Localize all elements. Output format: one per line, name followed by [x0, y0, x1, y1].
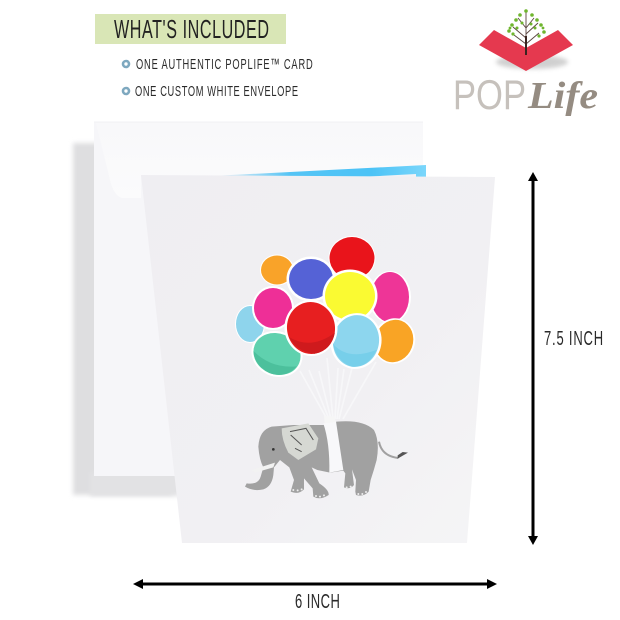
balloon: red center [281, 297, 341, 359]
elephant strap [323, 421, 343, 473]
logo: PopLife: Life [527, 75, 598, 117]
logo: PopLife [453, 9, 598, 118]
elephant tusk [252, 463, 275, 473]
balloon: red top [328, 236, 376, 280]
list of included items [123, 56, 313, 100]
balloon: orange right [366, 312, 422, 370]
card front [141, 175, 495, 543]
balloon: pink right [369, 271, 411, 323]
balloon strings [300, 358, 376, 419]
balloon: teal [244, 323, 310, 385]
balloon: yellow [322, 270, 378, 322]
elephant toes [292, 486, 367, 498]
balloon: light blue left [235, 305, 265, 343]
elephant tail [379, 442, 398, 458]
balloon: pink left [252, 286, 294, 330]
balloon: orange back left [260, 254, 294, 286]
logo: PopLife: POP [453, 71, 526, 118]
elephant [245, 416, 408, 498]
list of included items: ONE CUSTOM WHITE ENVELOPE [135, 83, 298, 100]
elephant body [245, 421, 378, 498]
elephant ear [282, 423, 318, 460]
list of included items: ONE AUTHENTIC POPLIFE™ CARD [136, 56, 313, 73]
label: 6 inch: 6 INCH [295, 590, 340, 613]
blue insert card peeking out [154, 165, 426, 182]
balloon: blue [286, 256, 336, 302]
balloon: light blue right [326, 309, 386, 373]
elephant eye [272, 448, 275, 451]
arrow: height [528, 172, 538, 545]
label: 7.5 inch: 7.5 INCH [544, 327, 603, 350]
envelope with shadow [73, 122, 423, 496]
balloons [235, 236, 422, 385]
arrow: width [133, 579, 497, 589]
heading: what's included: WHAT'S INCLUDED [114, 14, 269, 44]
